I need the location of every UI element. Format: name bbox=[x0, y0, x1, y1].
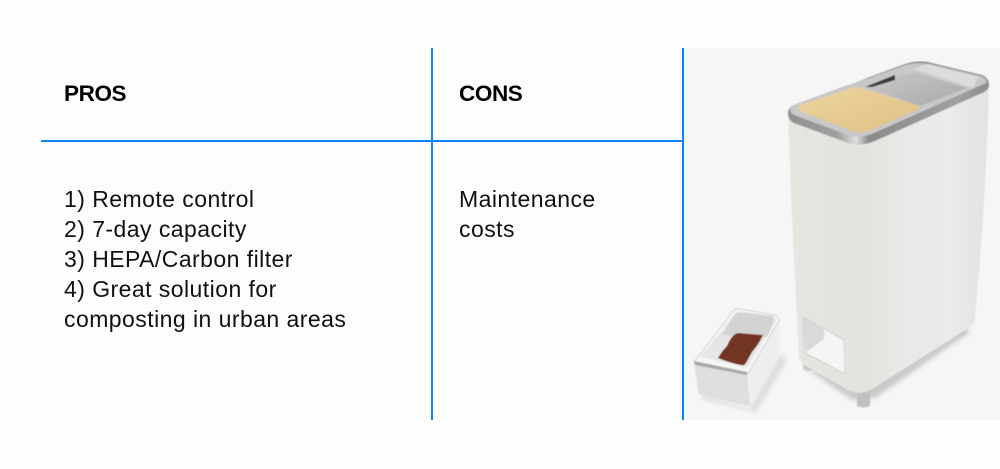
shadow under bin bbox=[806, 322, 970, 400]
horizontal divider bbox=[41, 140, 684, 142]
text block: pros list bbox=[64, 186, 346, 332]
text block: pros list: composting in urban areas bbox=[64, 306, 346, 332]
text block: cons list bbox=[459, 186, 596, 242]
vertical divider left bbox=[431, 48, 433, 420]
text block: pros list: 1) Remote control bbox=[64, 186, 254, 212]
vertical divider right bbox=[682, 48, 684, 420]
compost tray bbox=[694, 309, 780, 406]
text block: pros list: 4) Great solution for bbox=[64, 276, 277, 302]
panel: product photo bbox=[692, 60, 990, 415]
rim top face bbox=[790, 63, 986, 137]
text block: pros list: 2) 7-day capacity bbox=[64, 216, 247, 242]
heading: cons: CONS bbox=[459, 81, 522, 106]
compost bbox=[718, 333, 763, 365]
bin top rim bbox=[788, 61, 989, 145]
text block: pros list: 3) HEPA/Carbon filter bbox=[64, 246, 293, 272]
text block: cons list: Maintenance bbox=[459, 186, 596, 212]
bin body bbox=[788, 84, 989, 393]
tray back wall bbox=[722, 312, 775, 337]
control panel bbox=[913, 64, 978, 88]
metal top plate bbox=[866, 72, 967, 106]
tray shadow bbox=[700, 352, 786, 412]
bin front opening bbox=[803, 317, 844, 373]
wooden lid bbox=[798, 87, 919, 132]
heading: pros: PROS bbox=[64, 81, 126, 106]
bin feet bbox=[803, 318, 965, 408]
text block: cons list: costs bbox=[459, 216, 515, 242]
slot bbox=[865, 75, 895, 87]
